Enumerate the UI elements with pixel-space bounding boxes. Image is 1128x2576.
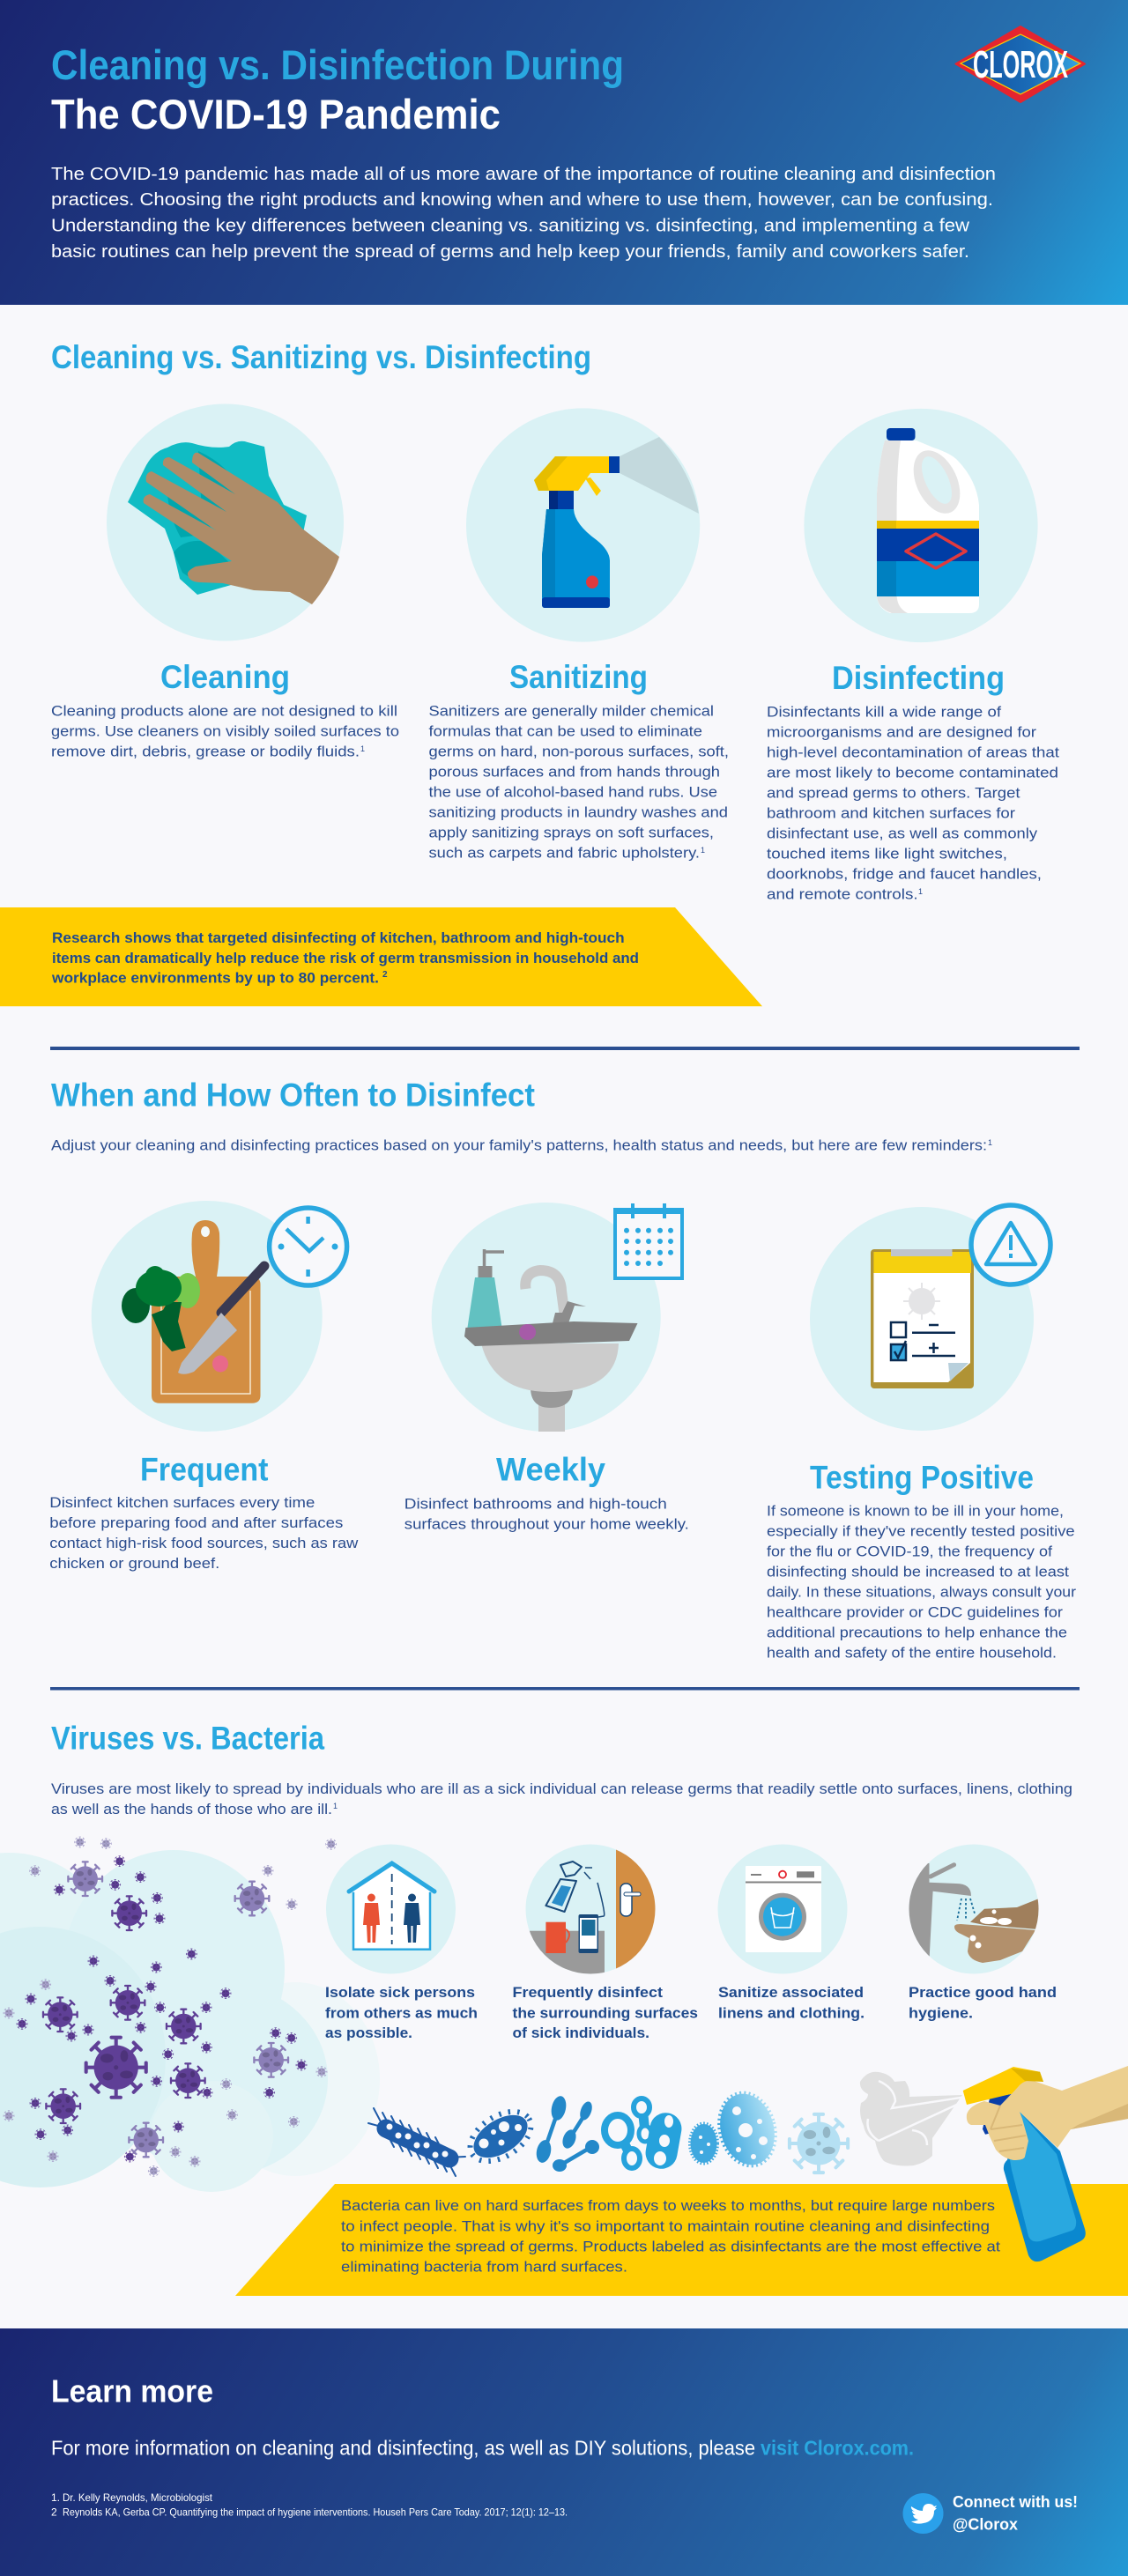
heading: when and how often: When and How Often to Disinfect	[51, 1077, 535, 1114]
text: weekly: Disinfect bathrooms and high-touch	[404, 1495, 667, 1512]
heading: cleaning: Cleaning	[160, 659, 290, 695]
text: weekly: surfaces throughout your home weekly.	[404, 1516, 689, 1533]
text: connect with us	[953, 2493, 1078, 2534]
callout: bacteria: Bacteria can live on hard surfaces from days to weeks to months, but require large numbers	[341, 2198, 995, 2214]
text: disinfecting: and spread germs to others. Target	[767, 784, 1020, 801]
callout: bacteria: to minimize the spread of germs. Products labeled as disinfectants are the most effective at	[341, 2239, 1000, 2255]
text: sanitizing: germs on hard, non-porous surfaces, soft,	[428, 744, 729, 760]
icon: clipboard and warning	[810, 1205, 1050, 1431]
footer banner	[0, 2328, 1128, 2576]
footnotes: Dr. Kelly Reynolds, Microbiologist	[63, 2491, 213, 2504]
footnotes: 1.	[51, 2491, 60, 2504]
icon: hand washing	[908, 1845, 1039, 1973]
intro paragraph: The COVID-19 pandemic has made all of us more aware of the importance of routine cleaning and disinfection	[51, 164, 996, 184]
text: cleaning: germs. Use cleaners on visibly soiled surfaces to	[51, 723, 399, 740]
text: disinfecting: Disinfectants kill a wide range of	[767, 703, 1001, 720]
footnotes: Reynolds KA, Gerba CP. Quantifying the impact of hygiene interventions. Househ Pers Care Today. 2017; 12(1): 12–13.	[63, 2506, 568, 2519]
heading: frequent: Frequent	[140, 1452, 268, 1488]
text: testing positive: especially if they've recently tested positive	[767, 1522, 1075, 1539]
icon: twitter	[902, 2493, 943, 2534]
header banner	[0, 0, 1128, 305]
footnotes	[51, 2491, 568, 2519]
text: sanitizing: apply sanitizing sprays on soft surfaces,	[428, 825, 714, 841]
text: isolate	[325, 1985, 478, 2041]
title: Cleaning vs. Disinfection During	[51, 41, 624, 88]
text: frequent	[49, 1494, 359, 1572]
text: isolate: as possible.	[325, 2025, 412, 2041]
text: cleaning: 1	[360, 744, 365, 753]
intro paragraph: Understanding the key differences between cleaning vs. sanitizing vs. disinfecting, and implementing a few	[51, 215, 969, 236]
text: frequent: chicken or ground beef.	[49, 1555, 219, 1572]
text: frequent: before preparing food and after surfaces	[49, 1514, 343, 1531]
footer call to action: For more information on cleaning and disinfecting, as well as DIY solutions, please	[51, 2437, 755, 2460]
illustration: hand with spray bottle	[963, 2066, 1128, 2261]
icon: washing machine	[717, 1845, 848, 1973]
text: sanitize linens: linens and clothing.	[718, 2005, 865, 2021]
text: reminder intro: Adjust your cleaning and disinfecting practices based on your family's patterns, health status and needs, but here are few reminders:	[51, 1137, 987, 1154]
footnotes: 2	[51, 2506, 57, 2519]
callout: research statistic	[0, 907, 762, 1006]
intro paragraph: practices. Choosing the right products and knowing when and where to use them, however, can be confusing.	[51, 189, 993, 210]
text: testing positive: additional precautions to help enhance the	[767, 1624, 1067, 1640]
text: disinfecting	[767, 703, 1059, 902]
intro paragraph: basic routines can help prevent the spread of germs and help keep your friends, family and coworkers safer.	[51, 241, 969, 262]
text: sanitizing: such as carpets and fabric upholstery.	[428, 845, 700, 862]
callout: research statistic: Research shows that targeted disinfecting of kitchen, bathroom and high-touch	[52, 930, 625, 946]
text: disinfecting: microorganisms and are designed for	[767, 723, 1036, 740]
heading: sanitizing: Sanitizing	[509, 659, 648, 695]
text: viruses intro: Viruses are most likely to spread by individuals who are ill as a sick individual can release germs that readily settle onto surfaces, linens, clothing	[51, 1780, 1072, 1797]
text: sanitize linens: Sanitize associated	[718, 1985, 864, 2001]
text: sanitizing: porous surfaces and from hands through	[428, 764, 720, 781]
heading: cleaning vs sanitizing vs disinfecting: Cleaning vs. Sanitizing vs. Disinfecting	[51, 339, 591, 375]
text: disinfecting: and remote controls.	[767, 885, 918, 902]
title: The COVID-19 Pandemic	[51, 91, 501, 137]
text: cleaning: remove dirt, debris, grease or bodily fluids.	[51, 744, 360, 760]
text: sanitizing: the use of alcohol-based hand rubs. Use	[428, 784, 717, 801]
text: sanitizing: formulas that can be used to eliminate	[428, 723, 702, 740]
text: sanitizing: 1	[701, 846, 705, 855]
text: testing positive: disinfecting should be increased to at least	[767, 1563, 1069, 1580]
text: testing positive: If someone is known to be ill in your home,	[767, 1502, 1064, 1519]
text: connect with us: @Clorox	[953, 2516, 1018, 2534]
callout: bacteria: to infect people. That is why it's so important to maintain routine cleaning and disinfecting	[341, 2218, 990, 2234]
text: viruses intro: 1	[333, 1802, 338, 1810]
text: frequent: Disinfect kitchen surfaces every time	[49, 1494, 315, 1511]
icon: spray bottle	[466, 408, 700, 642]
text: testing positive: health and safety of the entire household.	[767, 1644, 1057, 1661]
heading: weekly: Weekly	[496, 1452, 605, 1488]
text: isolate: from others as much	[325, 2005, 478, 2021]
text: reminder intro: 1	[988, 1138, 992, 1147]
text: testing positive: healthcare provider or CDC guidelines for	[767, 1603, 1063, 1620]
footer call to action: visit Clorox.com.	[761, 2437, 914, 2460]
text: frequently disinfect: the surrounding surfaces	[513, 2005, 698, 2021]
text: sanitizing	[428, 703, 729, 862]
callout: research statistic: workplace environments by up to 80 percent.	[51, 971, 379, 987]
text: hand hygiene: Practice good hand	[909, 1985, 1057, 2001]
text: disinfecting: touched items like light switches,	[767, 845, 1007, 862]
text: viruses intro: as well as the hands of those who are ill.	[51, 1801, 332, 1817]
text: disinfecting: doorknobs, fridge and faucet handles,	[767, 865, 1042, 882]
icon: isolate in house	[326, 1845, 456, 1973]
illustration: bacteria row	[368, 2072, 962, 2176]
illustration: virus cloud	[0, 1837, 380, 2192]
title	[51, 41, 624, 137]
callout: research statistic: 2	[382, 970, 388, 980]
text: sanitizing: sanitizing products in laundry washes and	[428, 804, 728, 821]
text: disinfecting: bathroom and kitchen surfaces for	[767, 804, 1015, 821]
icon: hand wiping with cloth	[107, 403, 344, 641]
text: isolate: Isolate sick persons	[325, 1985, 475, 2001]
callout: bacteria	[235, 2184, 1128, 2296]
icon: cutting board and clock	[92, 1201, 347, 1432]
text: sanitize linens	[718, 1985, 865, 2021]
callout: research statistic: items can dramatically help reduce the risk of germ transmission in household and	[52, 951, 639, 966]
text: connect with us: Connect with us!	[953, 2493, 1078, 2511]
text: frequent: contact high-risk food sources, such as raw	[49, 1535, 359, 1551]
text: testing positive: daily. In these situations, always consult your	[767, 1583, 1076, 1600]
text: hand hygiene: hygiene.	[909, 2005, 973, 2021]
text: cleaning: Cleaning products alone are not designed to kill	[51, 703, 397, 720]
intro paragraph	[51, 164, 996, 262]
text: frequently disinfect	[513, 1985, 698, 2041]
text: viruses intro	[51, 1780, 1072, 1817]
icon: sink and calendar	[432, 1203, 683, 1432]
text: cleaning	[51, 703, 399, 760]
text: disinfecting: are most likely to become contaminated	[767, 764, 1058, 781]
text: testing positive: for the flu or COVID-19, the frequency of	[767, 1543, 1052, 1559]
text: weekly	[404, 1495, 689, 1533]
text: hand hygiene	[909, 1985, 1057, 2021]
heading: disinfecting: Disinfecting	[832, 660, 1005, 696]
icon: bleach bottle	[804, 409, 1038, 642]
icon: disinfect surfaces	[525, 1845, 656, 1973]
text: frequently disinfect: of sick individuals.	[513, 2025, 649, 2041]
text: testing positive	[767, 1502, 1076, 1661]
callout: bacteria: eliminating bacteria from hard surfaces.	[341, 2259, 627, 2275]
text: disinfecting: high-level decontamination of areas that	[767, 744, 1059, 760]
text: frequently disinfect: Frequently disinfect	[513, 1985, 664, 2001]
heading: testing positive: Testing Positive	[810, 1460, 1034, 1496]
Clorox logo	[955, 26, 1085, 102]
text: disinfecting: disinfectant use, as well as commonly	[767, 825, 1038, 841]
text: disinfecting: 1	[918, 887, 923, 896]
text: sanitizing: Sanitizers are generally milder chemical	[428, 703, 714, 720]
heading: viruses vs bacteria: Viruses vs. Bacteria	[51, 1721, 324, 1757]
footer heading: Learn more	[51, 2373, 213, 2409]
